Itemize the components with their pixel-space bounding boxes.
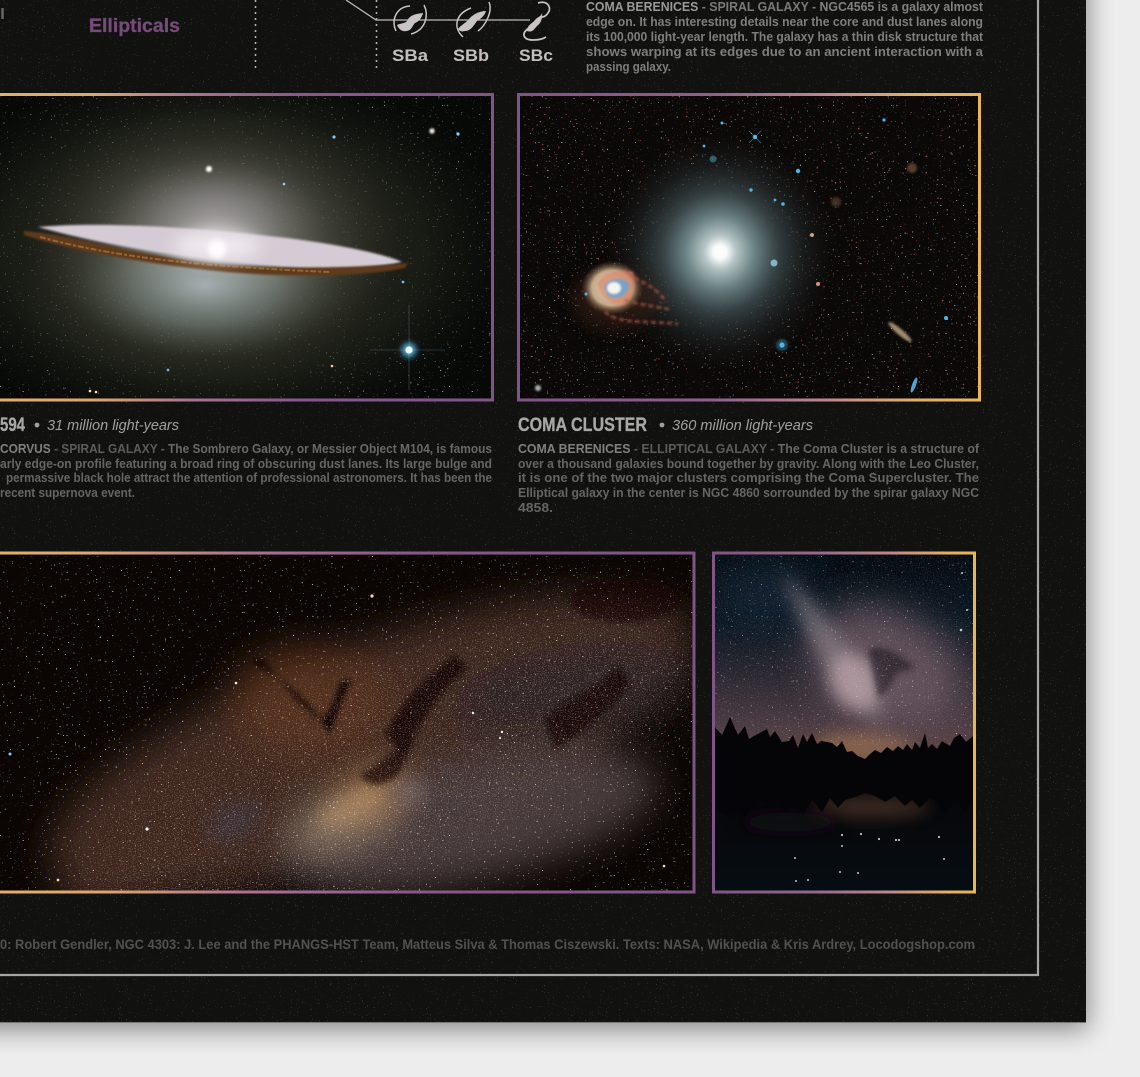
text block: Sombrero description: permassive black hole attract the attention of professional astronomers. It has been the	[6, 471, 492, 485]
reflected stars	[794, 572, 968, 882]
caption heading: Coma Cluster	[518, 415, 813, 436]
dark dust lanes	[250, 578, 680, 784]
caption heading: M104: 594	[0, 415, 25, 436]
blue stars and small galaxies	[535, 118, 948, 393]
text block: NGC4565 description: COMA BERENICES - SPIRAL GALAXY - NGC4565 is a galaxy almost	[586, 0, 984, 14]
text block: Coma description: COMA BERENICES - ELLIPTICAL GALAXY - The Coma Cluster is a structure of	[518, 442, 980, 456]
text block: NGC4565 description: edge on. It has interesting details near the core and dust lanes along	[586, 15, 983, 29]
branch line	[346, 0, 530, 20]
text block: Sombrero description: recent supernova event.	[0, 486, 135, 500]
photo: Coma cluster	[518, 94, 980, 400]
text block: NGC4565 description: shows warping at its edges due to an ancient interaction with a	[586, 45, 984, 59]
text block: NGC4565 description	[586, 0, 984, 74]
label: SBc: SBc	[519, 46, 553, 65]
icon: SBb galaxy	[457, 2, 490, 37]
milky way band	[16, 535, 724, 955]
dotted divider left	[254, 0, 256, 72]
text block: Sombrero description: arly edge-on profile featuring a broad ring of obscuring dust lanes. Its large bulge and	[0, 457, 492, 471]
text block: Coma description: Elliptical galaxy in the center is NGC 4860 sorrounded by the spirar galaxy NGC	[518, 486, 979, 500]
bright stars	[8, 594, 665, 881]
caption heading: Coma Cluster: 360 million light-years	[672, 417, 813, 434]
text block: NGC4565 description: passing galaxy.	[586, 60, 671, 74]
galactic core glow	[282, 776, 408, 864]
text block: Coma description: 4858.	[518, 501, 553, 515]
label: SBb: SBb	[453, 46, 489, 65]
icon: SBc galaxy	[524, 2, 550, 40]
dotted divider right	[376, 0, 378, 72]
text block: Sombrero description	[0, 442, 492, 500]
footer credits: 0: Robert Gendler, NGC 4303: J. Lee and the PHANGS-HST Team, Matteus Silva & Thomas Ciszewski. Texts: NASA, Wikipedia & Kris Ardrey, Locodogshop.com	[0, 936, 975, 952]
photo: Milky Way over a lake	[714, 553, 981, 892]
water reflection	[715, 790, 973, 891]
tree line silhouette	[715, 717, 973, 815]
text block: NGC4565 description: its 100,000 light-year length. The galaxy has a thin disk structure that	[586, 30, 984, 44]
label: SBa: SBa	[392, 46, 429, 65]
caption heading: M104: 31 million light-years	[47, 417, 179, 434]
text block: Sombrero description: CORVUS - SPIRAL GALAXY - The Sombrero Galaxy, or Messier Object M104, is famous	[0, 442, 492, 456]
milky way arc	[789, 581, 981, 749]
text block: Coma description	[518, 442, 980, 515]
barred spiral diagram	[346, 0, 553, 65]
text block: Coma description: over a thousand galaxies bound together by gravity. Along with the Leo Cluster,	[518, 457, 979, 471]
text block: Coma description: it is one of the two major clusters comprising the Coma Supercluster. The	[518, 471, 979, 485]
photo: Milky Way star field	[0, 552, 696, 894]
caption heading: M104	[0, 415, 179, 436]
label: Ellipticals: Ellipticals	[89, 16, 180, 37]
bright stars	[89, 128, 460, 393]
icon: SBa galaxy	[394, 5, 426, 34]
spiral galaxy	[573, 261, 678, 330]
clipped label fragment: l	[0, 6, 5, 23]
caption heading: Coma Cluster: COMA CLUSTER	[518, 415, 647, 436]
photo: Sombrero galaxy	[0, 60, 515, 440]
